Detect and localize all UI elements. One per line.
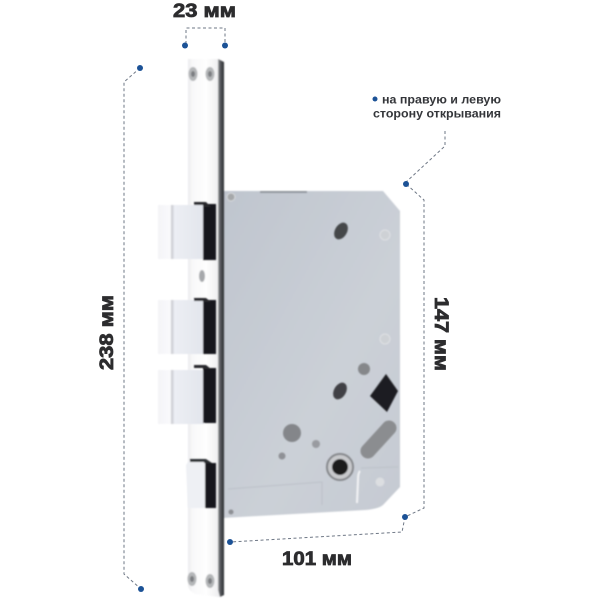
label: height 238 mm: 238 мм	[97, 295, 118, 370]
latch bolt	[186, 459, 216, 508]
lock body	[222, 191, 400, 518]
label: depth 101 mm: 101 мм	[282, 549, 352, 570]
screws: bottom	[188, 572, 214, 588]
slot: lower	[330, 380, 350, 402]
angled slot	[368, 428, 389, 451]
screw: centre	[358, 363, 370, 375]
bolt 2	[158, 298, 216, 354]
round hole	[283, 424, 301, 442]
screw: middle	[199, 270, 205, 282]
square spindle hole	[370, 374, 398, 412]
label: height 147 mm: 147 мм	[430, 297, 451, 371]
bolt 1	[158, 202, 216, 260]
screw: right lower	[380, 334, 390, 344]
screws: top	[188, 67, 214, 81]
marker dots	[137, 42, 409, 592]
slot: upper	[331, 220, 351, 242]
cylinder hole	[327, 454, 353, 480]
dimension lines	[124, 28, 445, 589]
pin: upper	[312, 440, 320, 448]
note: opening side: сторону открывания	[373, 106, 501, 120]
screw: top left	[227, 193, 235, 201]
screw: lower right	[376, 478, 384, 486]
note: opening side: на правую и левую	[382, 92, 501, 106]
screw: bottom left	[228, 510, 234, 514]
note: opening side	[373, 92, 501, 120]
label: width 23 mm: 23 мм	[173, 1, 236, 22]
bolt 3	[158, 365, 216, 424]
lock mechanism details	[227, 193, 398, 514]
screw: right upper	[380, 230, 390, 240]
pin: lower	[278, 452, 286, 460]
faceplate	[188, 59, 224, 597]
